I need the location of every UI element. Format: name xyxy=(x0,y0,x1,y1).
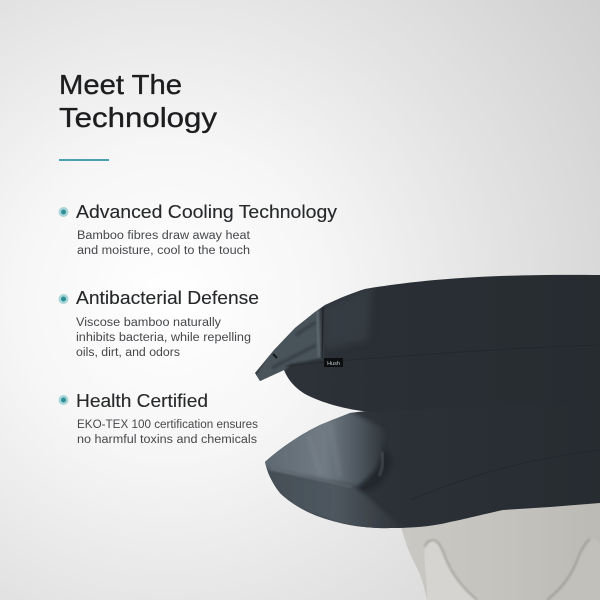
feature description: Viscose bamboo naturally xyxy=(76,317,221,329)
bullet icon xyxy=(58,395,68,405)
sewn label: Hush xyxy=(327,361,340,367)
feature: health certified xyxy=(58,391,258,446)
feature description: inhibits bacteria, while repelling xyxy=(76,332,251,344)
sewn label xyxy=(324,358,343,367)
title: Technology xyxy=(59,102,217,133)
upper pillow xyxy=(250,275,600,412)
bullet icon xyxy=(58,294,68,304)
feature heading: Advanced Cooling Technology xyxy=(76,202,337,222)
feature: advanced cooling technology xyxy=(58,202,337,257)
feature description xyxy=(77,230,251,257)
title xyxy=(59,69,217,133)
lower pillow xyxy=(258,400,600,532)
title: Meet The xyxy=(59,69,182,100)
feature description xyxy=(77,419,258,446)
feature description xyxy=(76,317,251,359)
feature description: no harmful toxins and chemicals xyxy=(77,434,257,446)
feature description: and moisture, cool to the touch xyxy=(77,245,250,257)
feature heading: Antibacterial Defense xyxy=(76,288,259,308)
concrete stool xyxy=(398,495,600,600)
bullet icon xyxy=(58,207,68,217)
accent divider xyxy=(59,159,109,161)
feature description: EKO-TEX 100 certification ensures xyxy=(77,419,258,431)
feature description: oils, dirt, and odors xyxy=(76,347,180,359)
feature: antibacterial defense xyxy=(58,288,259,359)
feature description: Bamboo fibres draw away heat xyxy=(77,230,251,242)
feature heading: Health Certified xyxy=(76,391,208,411)
